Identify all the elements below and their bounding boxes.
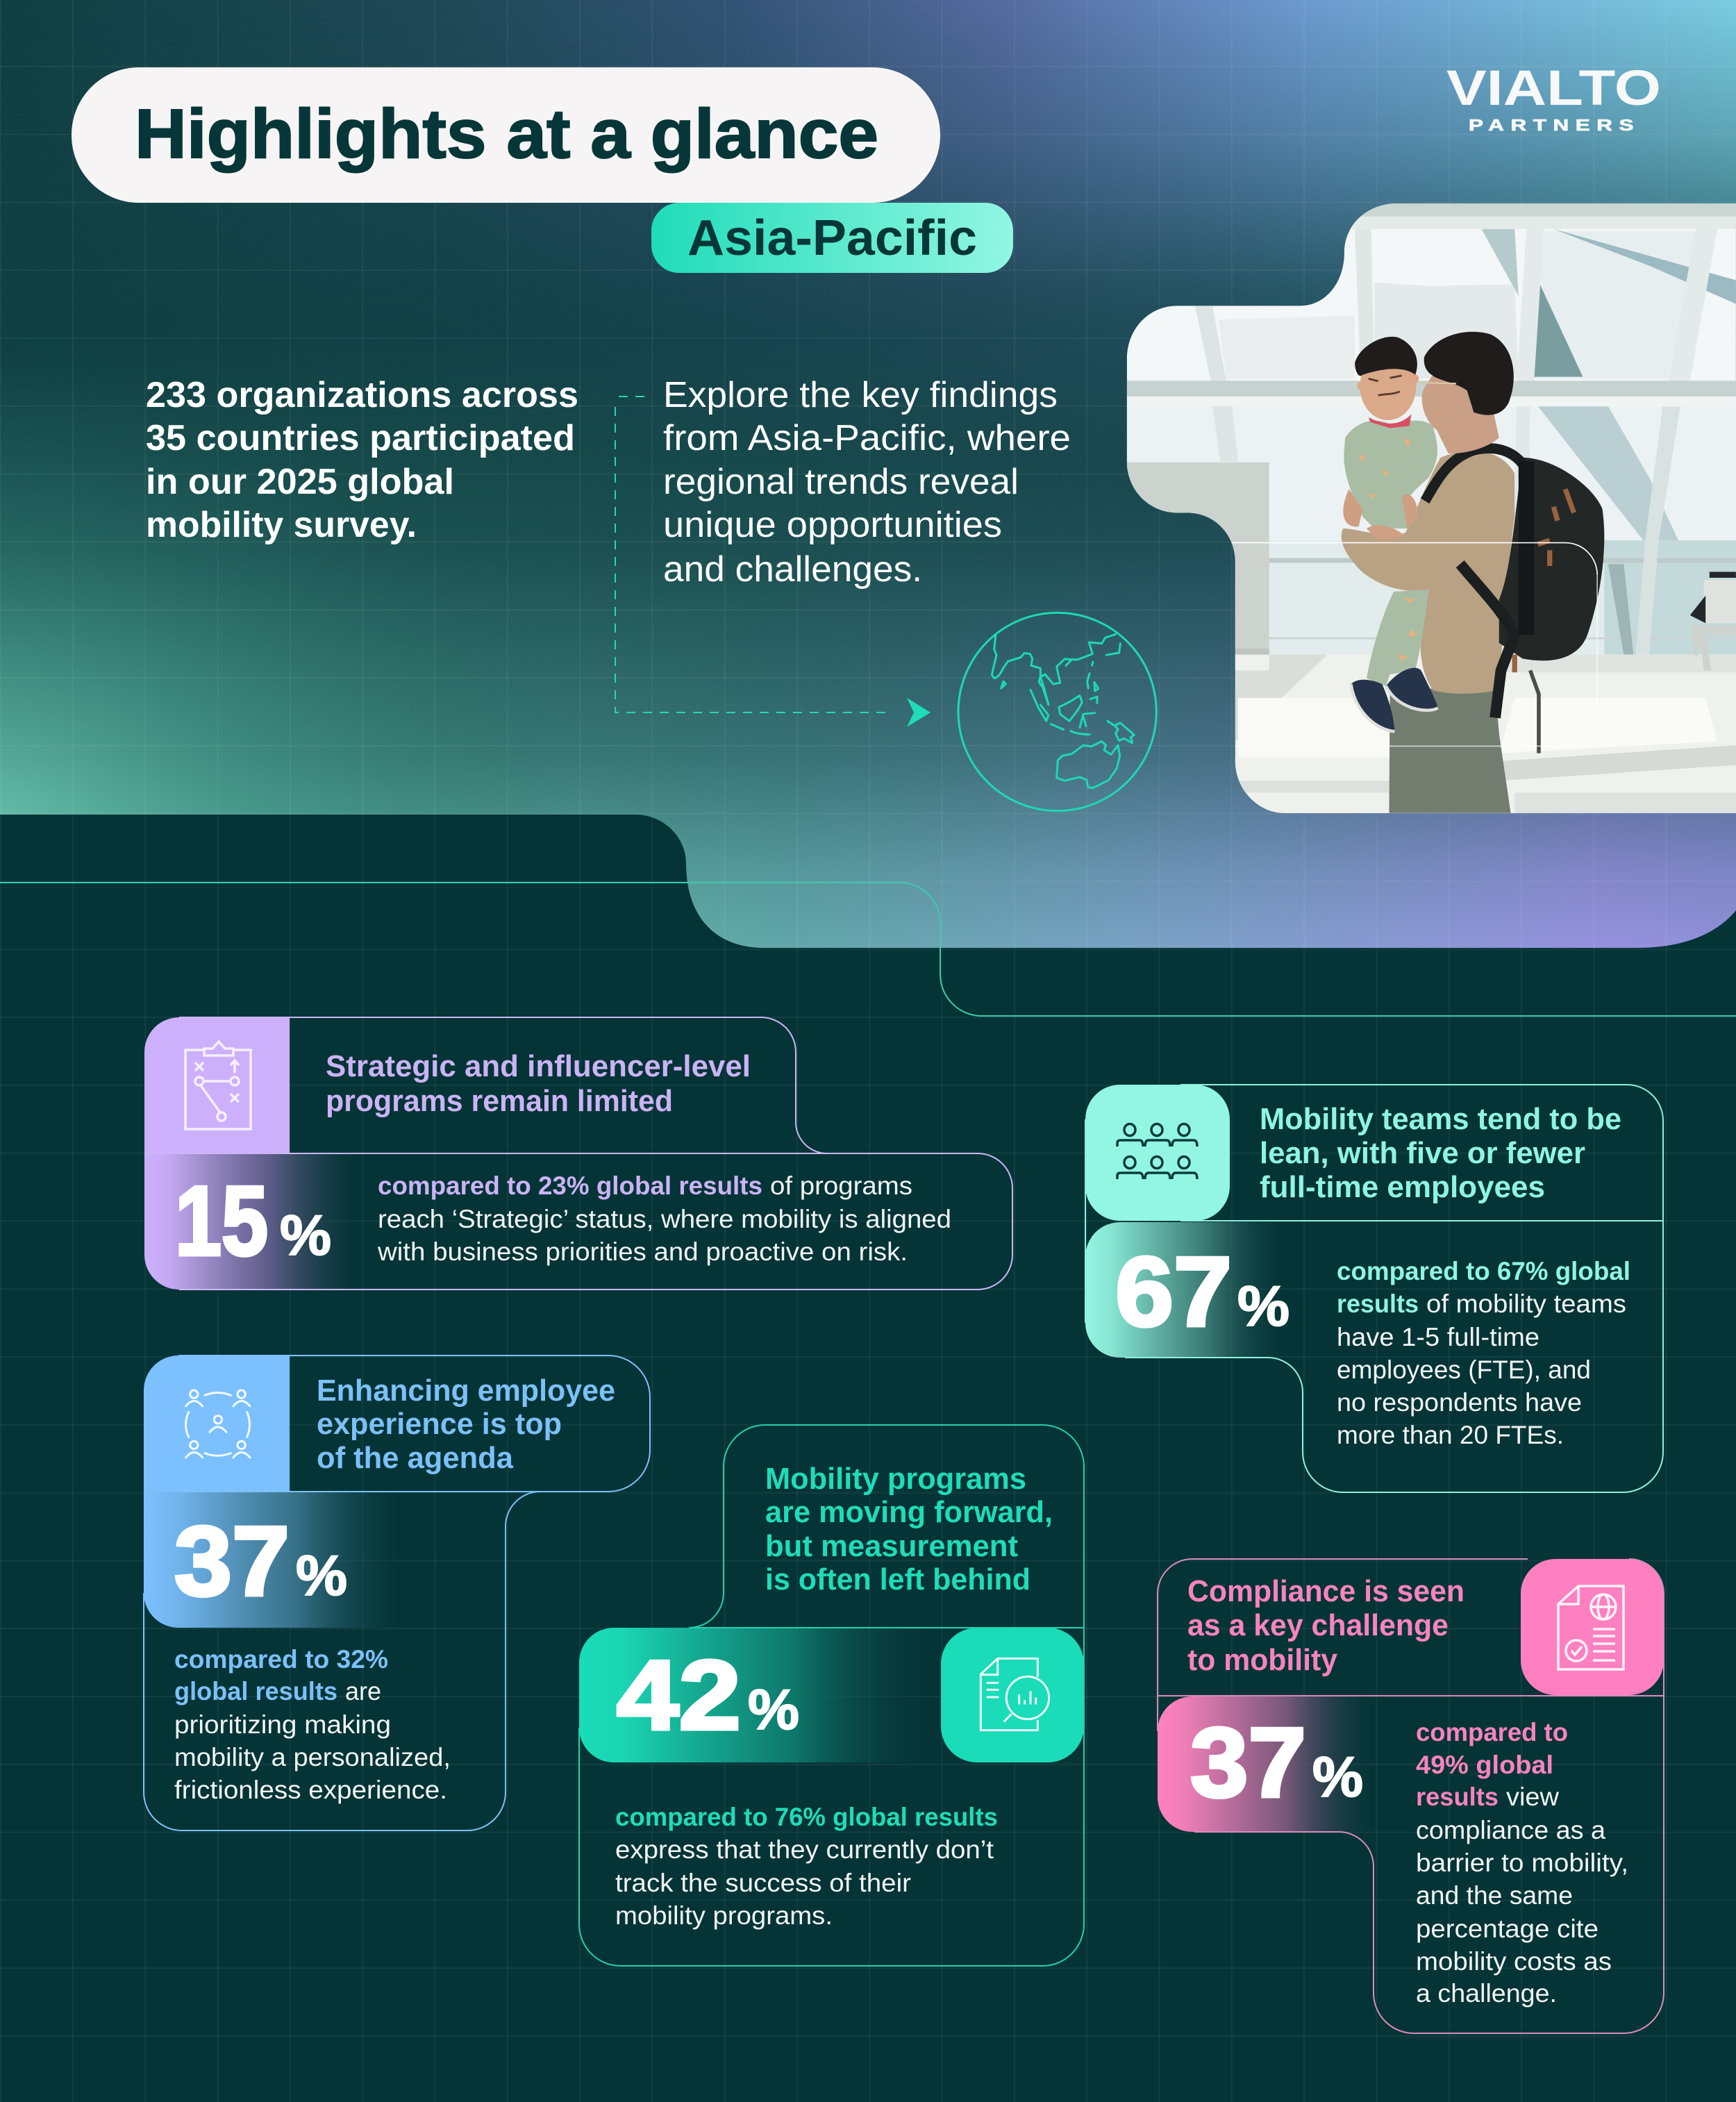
panel: measurement (green): mobility programs. xyxy=(615,1901,833,1930)
panel: compliance (pink): Compliance is seen xyxy=(1187,1574,1464,1608)
connector line xyxy=(0,883,1736,1016)
photo: parent carrying child at airport xyxy=(1125,201,1736,816)
intro text: explore findings: from Asia-Pacific, where xyxy=(663,418,1071,458)
panel: lean teams (mint): employees (FTE), and xyxy=(1337,1356,1591,1384)
icon: people in a circle xyxy=(144,1356,290,1492)
icon: document with magnifier xyxy=(941,1628,1084,1762)
panel: measurement (green): 42 xyxy=(617,1640,741,1751)
icon: six people xyxy=(1085,1085,1230,1221)
panel: employee experience (blue): % xyxy=(296,1544,347,1608)
panel: strategic programs (purple): compared to 23% global results xyxy=(378,1171,762,1200)
panel: employee experience (blue): 37 xyxy=(174,1506,290,1617)
icon: globe showing Asia-Pacific xyxy=(958,612,1156,811)
panel: employee experience (blue): experience is top xyxy=(317,1407,562,1441)
panel: lean teams (mint): no respondents have xyxy=(1337,1388,1582,1417)
panel: strategic programs (purple): reach ‘Strategic’ status, where mobility is aligned xyxy=(378,1205,951,1233)
panel: employee experience (blue): Enhancing employee xyxy=(317,1374,615,1408)
panel: strategic programs (purple): % xyxy=(280,1204,331,1267)
panel: measurement (green): % xyxy=(748,1678,799,1742)
panel: compliance (pink): and the same xyxy=(1416,1881,1573,1910)
logo: VIALTO xyxy=(1446,61,1661,116)
panel: lean teams (mint): lean, with five or fewer xyxy=(1260,1136,1585,1170)
panel: employee experience (blue) xyxy=(144,1356,650,1830)
panel: strategic programs (purple): Strategic and influencer-level xyxy=(326,1049,751,1083)
panel: compliance (pink): as a key challenge xyxy=(1187,1608,1449,1642)
panel: compliance (pink): a challenge. xyxy=(1416,1979,1557,2008)
panel: compliance (pink): to mobility xyxy=(1187,1643,1338,1677)
panel: compliance (pink): compared to xyxy=(1416,1718,1568,1746)
panel: compliance (pink): mobility costs as xyxy=(1416,1947,1612,1976)
panel: measurement (green): are moving forward, xyxy=(765,1495,1053,1529)
region pill xyxy=(651,203,1013,273)
icon: compliance document xyxy=(1521,1559,1664,1695)
intro text: survey participation: 233 organizations across xyxy=(146,375,578,415)
panel: employee experience (blue): mobility a personalized, xyxy=(174,1743,451,1771)
panel: compliance (pink): 49% global xyxy=(1416,1751,1553,1779)
intro text: explore findings: and challenges. xyxy=(663,549,922,590)
hero gradient panel xyxy=(0,0,1736,972)
panel: lean teams (mint): % xyxy=(1237,1275,1290,1338)
title pill xyxy=(72,67,940,203)
panel: measurement (green): compared to 76% global results xyxy=(615,1803,998,1831)
region pill: Asia-Pacific xyxy=(687,210,977,266)
panel: compliance (pink): 37 xyxy=(1190,1708,1306,1818)
panel: compliance (pink): percentage cite xyxy=(1416,1915,1599,1943)
panel: compliance (pink): % xyxy=(1312,1746,1363,1809)
panel: measurement (green): but measurement xyxy=(765,1529,1018,1563)
panel: strategic programs (purple): programs remain limited xyxy=(326,1084,673,1118)
arrow: dashed connector to globe xyxy=(615,397,930,727)
panel: strategic programs (purple): of programs xyxy=(770,1171,912,1200)
intro text: explore findings: Explore the key findings xyxy=(663,375,1058,415)
panel: compliance (pink): results xyxy=(1416,1783,1499,1811)
panel: lean teams (mint): have 1-5 full-time xyxy=(1337,1323,1539,1351)
panel: employee experience (blue): global results xyxy=(174,1677,337,1705)
logo xyxy=(1446,61,1661,134)
panel: measurement (green): is often left behind xyxy=(765,1562,1030,1596)
title pill: Highlights at a glance xyxy=(135,95,878,173)
panel: lean teams (mint) xyxy=(1085,1085,1663,1492)
panel: lean teams (mint): compared to 67% global xyxy=(1337,1257,1630,1285)
panel: lean teams (mint): results xyxy=(1337,1290,1419,1318)
panel: compliance (pink): barrier to mobility, xyxy=(1416,1849,1628,1877)
panel: employee experience (blue): of the agenda xyxy=(317,1441,514,1475)
panel: employee experience (blue): frictionless experience. xyxy=(174,1776,447,1804)
panel: lean teams (mint): more than 20 FTEs. xyxy=(1337,1421,1564,1449)
panel: compliance (pink) xyxy=(1158,1559,1664,2033)
panel: lean teams (mint): Mobility teams tend to be xyxy=(1260,1102,1621,1136)
panel: strategic programs (purple): with business priorities and proactive on risk. xyxy=(377,1237,908,1266)
panel: compliance (pink): compliance as a xyxy=(1416,1816,1605,1844)
icon: clipboard play diagram xyxy=(144,1017,290,1153)
panel: lean teams (mint): full-time employees xyxy=(1260,1170,1545,1204)
panel: employee experience (blue): compared to 32% xyxy=(174,1645,388,1674)
panel: strategic programs (purple): 15 xyxy=(175,1166,268,1276)
panel: compliance (pink): view xyxy=(1506,1783,1559,1811)
intro text: survey participation: in our 2025 global xyxy=(146,462,454,502)
panel: measurement (green): express that they currently don’t xyxy=(615,1835,994,1864)
panel: employee experience (blue): are xyxy=(345,1677,381,1705)
panel: employee experience (blue): prioritizing making xyxy=(174,1710,391,1739)
panel: strategic programs (purple) xyxy=(144,1017,1012,1290)
intro text: explore findings: unique opportunities xyxy=(663,505,1002,545)
intro text: explore findings xyxy=(663,375,1071,590)
panel: lean teams (mint): 67 xyxy=(1115,1237,1232,1347)
intro text: explore findings: regional trends reveal xyxy=(663,462,1019,502)
panel: measurement (green): Mobility programs xyxy=(765,1462,1026,1496)
panel: measurement (green) xyxy=(579,1425,1084,1966)
panel: lean teams (mint): of mobility teams xyxy=(1426,1290,1626,1318)
intro text: survey participation xyxy=(146,375,578,545)
panel: measurement (green): track the success of their xyxy=(615,1869,911,1897)
intro text: survey participation: mobility survey. xyxy=(146,505,417,545)
intro text: survey participation: 35 countries participated xyxy=(146,418,575,458)
logo: PARTNERS xyxy=(1469,116,1640,134)
